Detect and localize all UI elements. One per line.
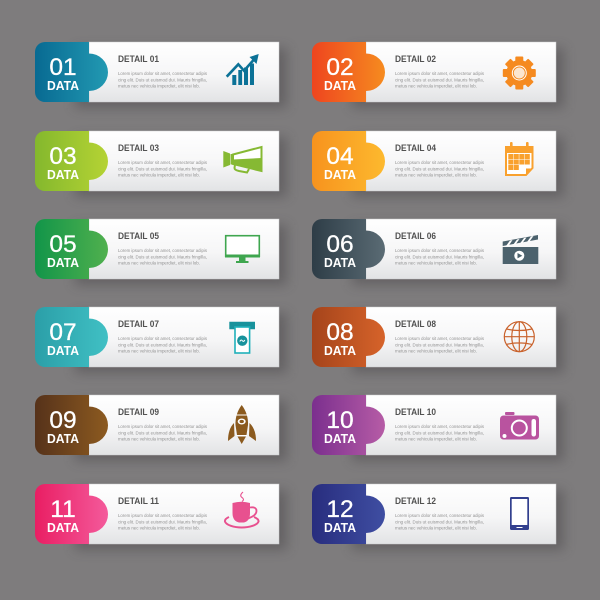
body text: Lorem ipsum dolor sit amet, consectetur adipis [395,71,485,77]
heading: DETAIL 08 [395,319,436,329]
heading: DETAIL 09 [118,407,159,417]
icon: smartphone [510,497,529,530]
body text [118,513,208,532]
body text [395,160,485,178]
tab 10 [312,395,385,455]
body text: metus nec vehicula imperdiet, elit nisi lob. [118,436,200,442]
tab label: DATA [47,255,80,270]
number 09: 09 [49,407,77,434]
card 10 [312,395,564,461]
body text: Lorem ipsum dolor sit amet, consectetur adipis [118,424,208,430]
body text: metus nec vehicula imperdiet, elit nisi lob. [395,260,477,266]
heading: DETAIL 02 [395,54,436,64]
tab 11 [35,484,108,544]
card 01 [35,42,287,108]
card 04 [312,131,564,197]
body text [395,336,485,354]
number 08: 08 [326,319,354,346]
body text: cing elit. Duis ut euismod dui. Mauris fringilla, [118,342,207,348]
number 12: 12 [326,496,354,523]
body text: Lorem ipsum dolor sit amet, consectetur adipis [118,513,208,519]
icon: cash machine [229,322,255,353]
card 03 [35,131,287,197]
tab 02 [312,42,385,102]
body text: cing elit. Duis ut euismod dui. Mauris fringilla, [118,254,207,260]
heading: DETAIL 04 [395,143,436,153]
icon: coffee cup [225,492,259,528]
tab label: DATA [324,520,357,535]
body text: cing elit. Duis ut euismod dui. Mauris fringilla, [118,430,207,436]
body text: metus nec vehicula imperdiet, elit nisi lob. [118,84,200,90]
number 01: 01 [49,54,77,81]
tab 08 [312,307,385,367]
heading: DETAIL 05 [118,231,159,241]
body text: Lorem ipsum dolor sit amet, consectetur adipis [395,160,485,166]
icon: camera [500,412,539,440]
body text: metus nec vehicula imperdiet, elit nisi lob. [118,526,200,532]
body text: Lorem ipsum dolor sit amet, consectetur adipis [395,336,485,342]
tab label: DATA [47,520,80,535]
body text [118,248,208,266]
tab 04 [312,131,385,191]
heading: DETAIL 11 [118,496,159,506]
card 02 [312,42,564,108]
body text: metus nec vehicula imperdiet, elit nisi lob. [395,526,477,532]
body text: Lorem ipsum dolor sit amet, consectetur adipis [395,248,485,254]
body text [395,248,485,266]
tab label: DATA [324,255,357,270]
icon: calendar [505,142,533,175]
icon: rocket [228,405,256,444]
icon: megaphone [223,147,262,172]
icon: gear [503,56,536,90]
body text [395,424,485,442]
body text [118,160,208,178]
card 09 [35,395,287,461]
body text: Lorem ipsum dolor sit amet, consectetur adipis [395,424,485,430]
body text: metus nec vehicula imperdiet, elit nisi lob. [395,436,477,442]
tab label: DATA [324,167,357,182]
number 07: 07 [49,319,77,346]
body text: cing elit. Duis ut euismod dui. Mauris fringilla, [395,519,484,525]
tab label: DATA [324,431,357,446]
body text: cing elit. Duis ut euismod dui. Mauris fringilla, [395,342,484,348]
icon: globe [504,322,534,352]
body text: Lorem ipsum dolor sit amet, consectetur adipis [118,160,208,166]
heading: DETAIL 06 [395,231,436,241]
tab 01 [35,42,108,102]
card 05 [35,219,287,285]
number 03: 03 [49,143,77,170]
body text: cing elit. Duis ut euismod dui. Mauris fringilla, [395,254,484,260]
icon: monitor [225,236,260,263]
heading: DETAIL 12 [395,496,436,506]
body text: Lorem ipsum dolor sit amet, consectetur adipis [118,71,208,77]
tab 06 [312,219,385,279]
body text: metus nec vehicula imperdiet, elit nisi lob. [395,172,477,178]
number 11: 11 [50,496,76,523]
body text: metus nec vehicula imperdiet, elit nisi lob. [118,172,200,178]
tab label: DATA [47,431,80,446]
body text [118,71,208,90]
tab 05 [35,219,108,279]
heading: DETAIL 10 [395,407,436,417]
body text [395,71,485,90]
number 06: 06 [326,231,354,258]
body text: Lorem ipsum dolor sit amet, consectetur adipis [118,248,208,254]
body text: metus nec vehicula imperdiet, elit nisi lob. [395,84,477,90]
body text [118,424,208,442]
tab label: DATA [324,78,357,93]
tab 12 [312,484,385,544]
body text: Lorem ipsum dolor sit amet, consectetur adipis [395,513,485,519]
body text: cing elit. Duis ut euismod dui. Mauris fringilla, [395,77,484,83]
heading: DETAIL 07 [118,319,159,329]
tab label: DATA [47,167,80,182]
body text: cing elit. Duis ut euismod dui. Mauris fringilla, [118,166,207,172]
body text: metus nec vehicula imperdiet, elit nisi lob. [118,348,200,354]
body text: cing elit. Duis ut euismod dui. Mauris fringilla, [118,519,207,525]
card 08 [312,307,564,373]
body text [395,513,485,532]
body text: cing elit. Duis ut euismod dui. Mauris fringilla, [395,430,484,436]
number 02: 02 [326,54,354,81]
number 04: 04 [326,143,354,170]
body text [118,336,208,354]
tab 09 [35,395,108,455]
card 06 [312,219,564,285]
icon: clapperboard [503,235,538,264]
heading: DETAIL 01 [118,54,159,64]
body text: Lorem ipsum dolor sit amet, consectetur adipis [118,336,208,342]
body text: cing elit. Duis ut euismod dui. Mauris fringilla, [118,77,207,83]
tab label: DATA [47,343,80,358]
icon: growth chart [227,54,259,85]
body text: cing elit. Duis ut euismod dui. Mauris fringilla, [395,166,484,172]
body text: metus nec vehicula imperdiet, elit nisi lob. [395,348,477,354]
card 12 [312,484,564,550]
card 11 [35,484,287,550]
tab label: DATA [324,343,357,358]
card 07 [35,307,287,373]
tab 03 [35,131,108,191]
body text: metus nec vehicula imperdiet, elit nisi lob. [118,260,200,266]
number 05: 05 [49,231,77,258]
tab 07 [35,307,108,367]
tab label: DATA [47,78,80,93]
heading: DETAIL 03 [118,143,159,153]
number 10: 10 [326,407,354,434]
